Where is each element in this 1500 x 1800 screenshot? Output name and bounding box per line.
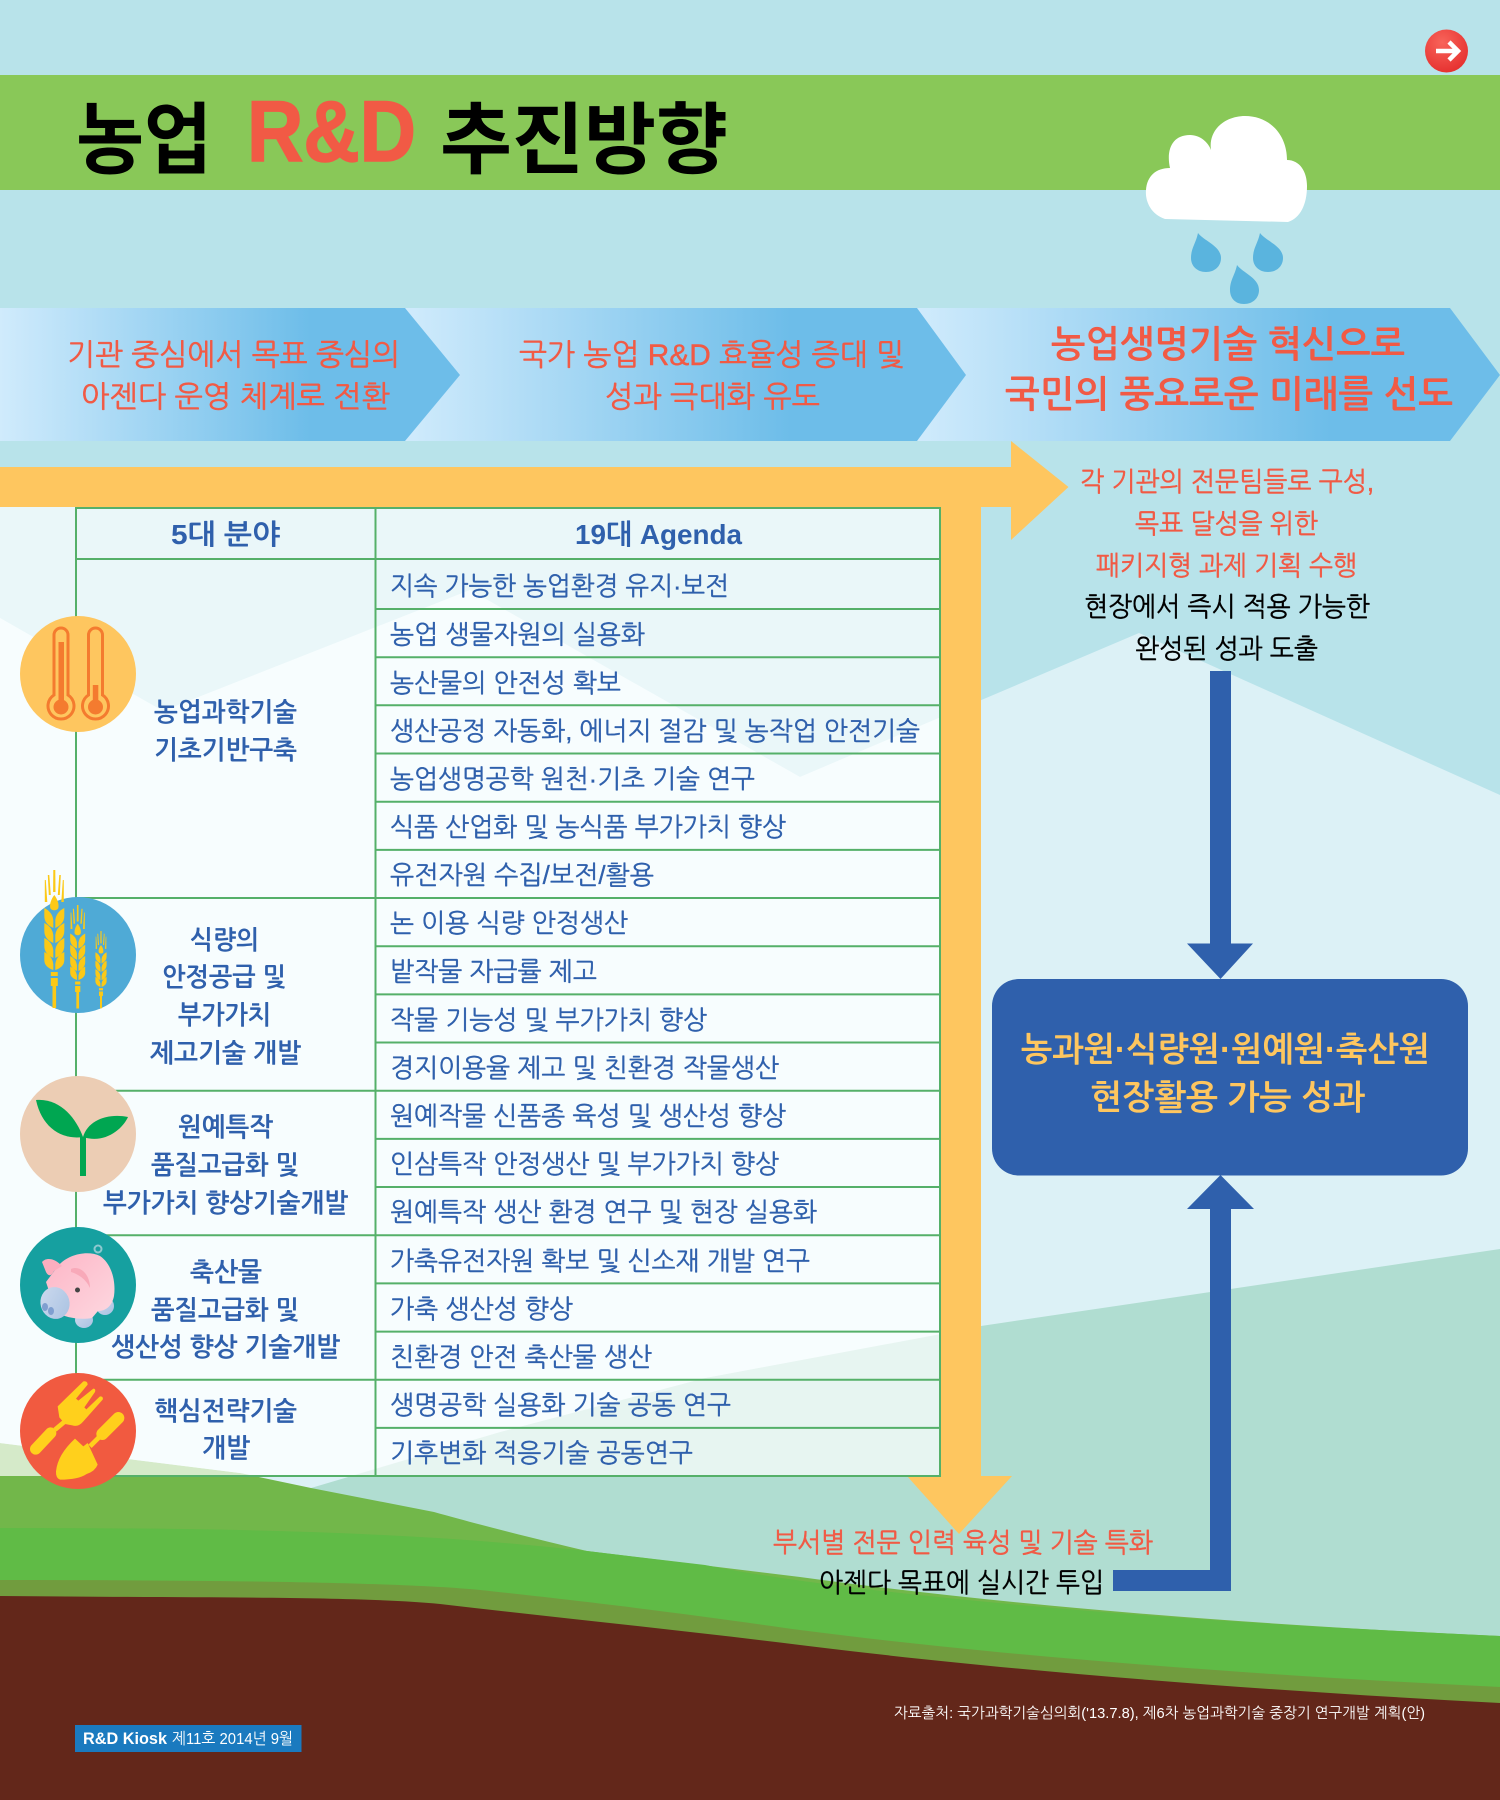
agenda list: 19 items: 농업 생물자원의 실용화 — [390, 620, 645, 650]
icon: rain cloud — [1146, 116, 1307, 304]
category 4 label: 품질고급화 및 — [151, 1295, 299, 1325]
icon: wheat — [20, 870, 136, 1013]
chevron banner: goals — [0, 308, 1500, 441]
category 1 label: 기초기반구축 — [154, 735, 297, 765]
icon: red arrow button — [1425, 30, 1468, 72]
background: brown soil — [0, 1596, 1500, 1800]
category 2 label: 제고기술 개발 — [150, 1038, 301, 1068]
title band — [0, 75, 1500, 190]
source note: 자료출처: 국가과학기술심의회('13.7.8), 제6차 농업과학기술 중장기 연구개발 계획(안) — [894, 1705, 1425, 1722]
table header: 19대 Agenda: 19대 Agenda — [575, 519, 742, 550]
category 5 label: 핵심전략기술 — [154, 1396, 297, 1426]
agenda list: 19 items: 농산물의 안전성 확보 — [390, 668, 621, 698]
icon: sprout — [20, 1076, 136, 1192]
background: bright green ground — [0, 1528, 1500, 1700]
category 4 label — [111, 1257, 340, 1362]
title text: 농업: 농업 — [76, 96, 212, 184]
outcome box: 농과원·식량원·원예원·축산원 — [1021, 1031, 1430, 1069]
category 1 label: 농업과학기술 — [154, 697, 297, 727]
chevron 3: 농업생명기술 혁신으로 — [1051, 324, 1405, 365]
agenda list: 19 items: 밭작물 자급률 제고 — [390, 956, 597, 986]
icon: thermometers — [20, 616, 136, 732]
outcome box: 현장활용 가능 성과 — [1090, 1079, 1365, 1117]
chevron 2 — [405, 308, 966, 441]
right text block: 각 기관의 전문팀들로 구성, — [1080, 467, 1374, 497]
category 5 label — [154, 1396, 297, 1463]
icon: pig — [20, 1227, 136, 1343]
right text block: 현장에서 즉시 적용 가능한 — [1084, 592, 1370, 622]
orange arrows: right and down — [0, 441, 1068, 1534]
table translucent panel — [0, 507, 941, 1476]
category 2 label — [150, 925, 301, 1068]
agenda list: 19 items: 가축유전자원 확보 및 신소재 개발 연구 — [390, 1246, 810, 1276]
agenda list: 19 items: 가축 생산성 향상 — [390, 1294, 573, 1324]
bottom text block — [773, 1528, 1153, 1598]
agenda list: 19 items: 원예작물 신품종 육성 및 생산성 향상 — [390, 1101, 786, 1131]
agenda list: 19 items: 농업생명공학 원천·기초 기술 연구 — [390, 764, 755, 794]
icon: garden tools — [20, 1373, 136, 1489]
category 3 label — [103, 1112, 348, 1218]
category 4 label: 축산물 — [190, 1257, 262, 1287]
chevron 3 — [917, 308, 1500, 441]
agenda list: 19 items: 논 이용 식량 안정생산 — [390, 908, 628, 938]
background: olive soil layer — [0, 1580, 1500, 1720]
agenda list: 19 items: 작물 기능성 및 부가가치 향상 — [390, 1005, 707, 1035]
issue tag: R&D Kiosk — [83, 1729, 168, 1748]
category 3 label: 원예특작 — [178, 1112, 274, 1142]
agenda list: 19 items: 식품 산업화 및 농식품 부가가치 향상 — [390, 812, 786, 842]
category 2 label: 부가가치 — [178, 1000, 271, 1030]
chevron 1: 아젠다 운영 체계로 전환 — [81, 381, 390, 414]
bottom text block: 아젠다 목표에 실시간 투입 — [819, 1568, 1104, 1598]
agenda list: 19 items: 지속 가능한 농업환경 유지·보전 — [390, 571, 729, 601]
right text block: 패키지형 과제 기획 수행 — [1096, 551, 1357, 581]
right text block: 완성된 성과 도출 — [1135, 634, 1318, 664]
agenda list: 19 items: 기후변화 적응기술 공동연구 — [390, 1438, 693, 1468]
blue arrow up — [1113, 1175, 1254, 1591]
chevron 1: 기관 중심에서 목표 중심의 — [67, 339, 400, 372]
category 5 label: 개발 — [202, 1433, 250, 1463]
chevron 2: 성과 극대화 유도 — [605, 381, 820, 414]
chevron 2: 국가 농업 R&D 효율성 증대 및 — [519, 339, 904, 372]
agenda list: 19 items: 친환경 안전 축산물 생산 — [390, 1342, 652, 1372]
issue tag — [75, 1725, 302, 1752]
agenda list: 19 items: 유전자원 수집/보전/활용 — [390, 860, 654, 890]
blue arrow down — [1187, 671, 1253, 979]
issue tag: 제11호 2014년 9월 — [172, 1730, 293, 1748]
agenda list: 19 items: 생산공정 자동화, 에너지 절감 및 농작업 안전기술 — [390, 716, 920, 746]
agenda list: 19 items: 인삼특작 안정생산 및 부가가치 향상 — [390, 1149, 779, 1179]
background: green hill — [0, 1443, 1500, 1700]
category 3 label: 품질고급화 및 — [151, 1150, 299, 1180]
right text block — [1080, 467, 1374, 664]
category 2 label: 식량의 — [190, 925, 259, 955]
right text block: 목표 달성을 위한 — [1135, 509, 1318, 539]
category 2 label: 안정공급 및 — [162, 962, 286, 992]
chevron 3: 국민의 풍요로운 미래를 선도 — [1005, 374, 1453, 415]
title text: 추진방향: 추진방향 — [440, 96, 728, 184]
table — [76, 508, 940, 1476]
title text: R&D: R&D — [247, 84, 416, 180]
agenda list: 19 items: 생명공학 실용화 기술 공동 연구 — [390, 1390, 731, 1420]
category 3 label: 부가가치 향상기술개발 — [103, 1188, 348, 1218]
background: pale mountains — [0, 590, 1500, 1520]
bottom text block: 부서별 전문 인력 육성 및 기술 특화 — [773, 1528, 1153, 1558]
category 1 label — [154, 697, 297, 765]
table header: 5대 분야: 5대 분야 — [171, 519, 281, 550]
outcome box — [992, 979, 1468, 1176]
agenda list: 19 items — [390, 571, 920, 1468]
background: teal hill — [311, 1249, 1500, 1700]
agenda list: 19 items: 원예특작 생산 환경 연구 및 현장 실용화 — [390, 1197, 817, 1227]
agenda list: 19 items: 경지이용율 제고 및 친환경 작물생산 — [390, 1053, 779, 1083]
category 4 label: 생산성 향상 기술개발 — [111, 1332, 340, 1362]
chevron 1 — [0, 308, 460, 441]
